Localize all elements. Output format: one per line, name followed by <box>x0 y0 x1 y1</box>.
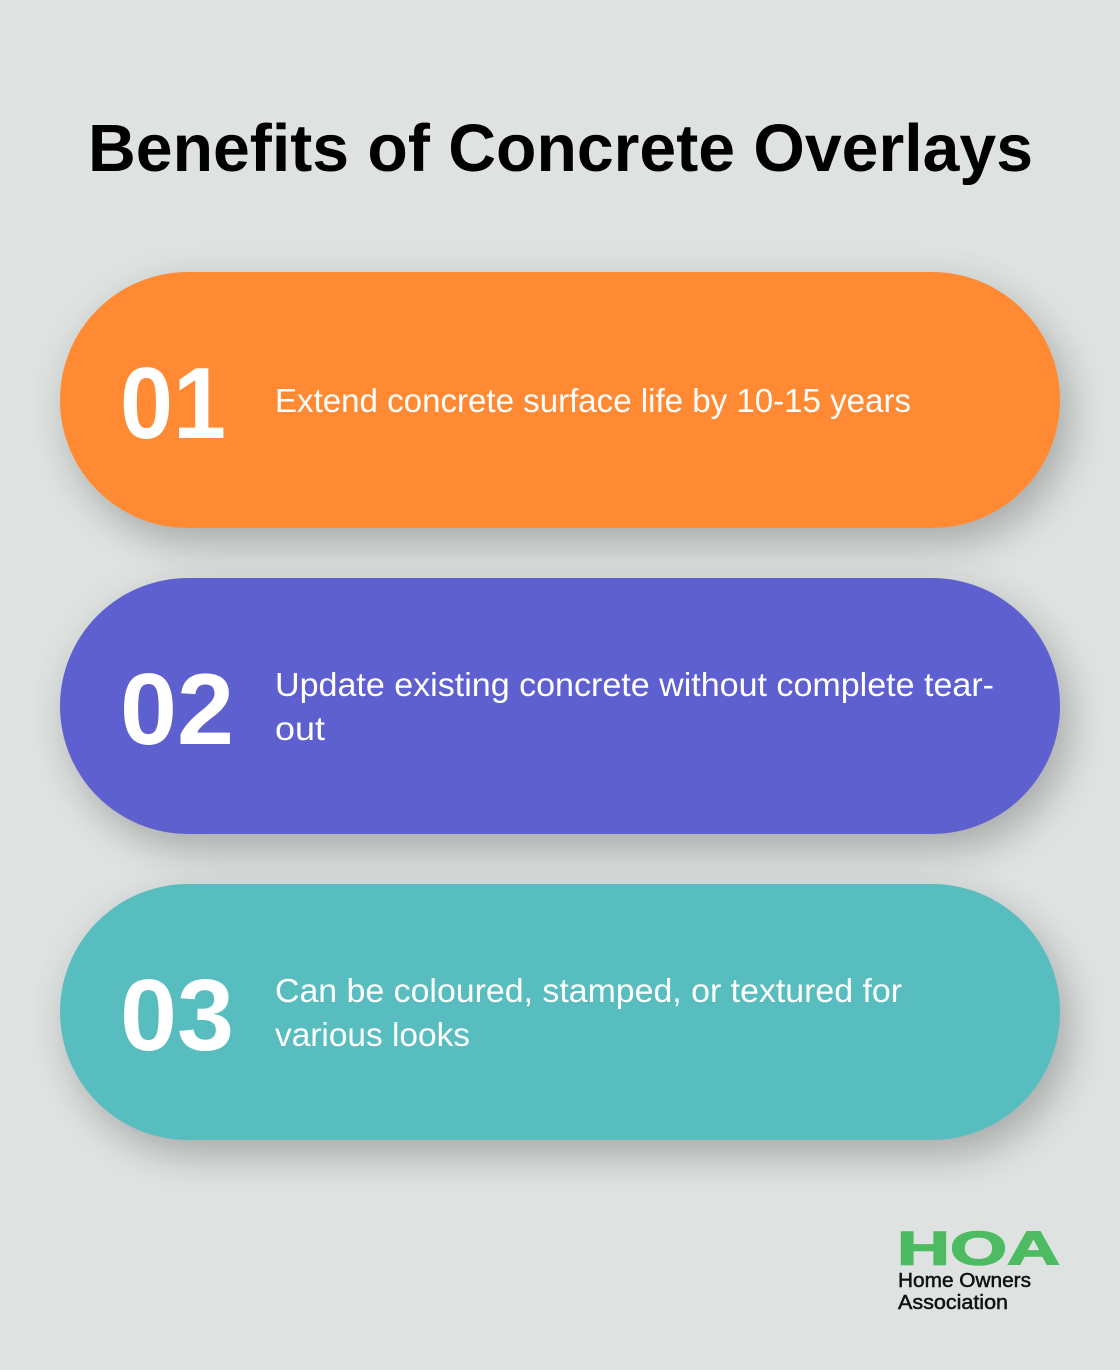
number 02: 02 <box>120 654 234 766</box>
logo: Home Owners Association: Association <box>898 1292 1008 1314</box>
text 02: Update existing concrete without complete tear- <box>275 666 994 703</box>
panel: benefit 03 background <box>60 884 1060 1140</box>
panel: benefit 02 background <box>60 578 1060 834</box>
benefit 02 content: out <box>275 710 325 747</box>
title: Benefits of Concrete Overlays <box>88 111 1033 186</box>
number 01: 01 <box>120 348 226 460</box>
benefit 03 content <box>120 960 902 1072</box>
text 01: Extend concrete surface life by 10-15 years <box>275 382 911 419</box>
benefit 01 content <box>120 348 911 460</box>
text 03: Can be coloured, stamped, or textured for <box>275 972 902 1009</box>
panel: benefit 01 background <box>60 272 1060 528</box>
benefit 03 content: various looks <box>275 1016 470 1053</box>
number 03: 03 <box>120 960 234 1072</box>
logo mark HOA: HOA <box>897 1222 1060 1274</box>
benefit 02 content <box>120 654 994 766</box>
logo name: Home Owners <box>898 1270 1031 1292</box>
logo: Home Owners Association <box>897 1222 1060 1314</box>
